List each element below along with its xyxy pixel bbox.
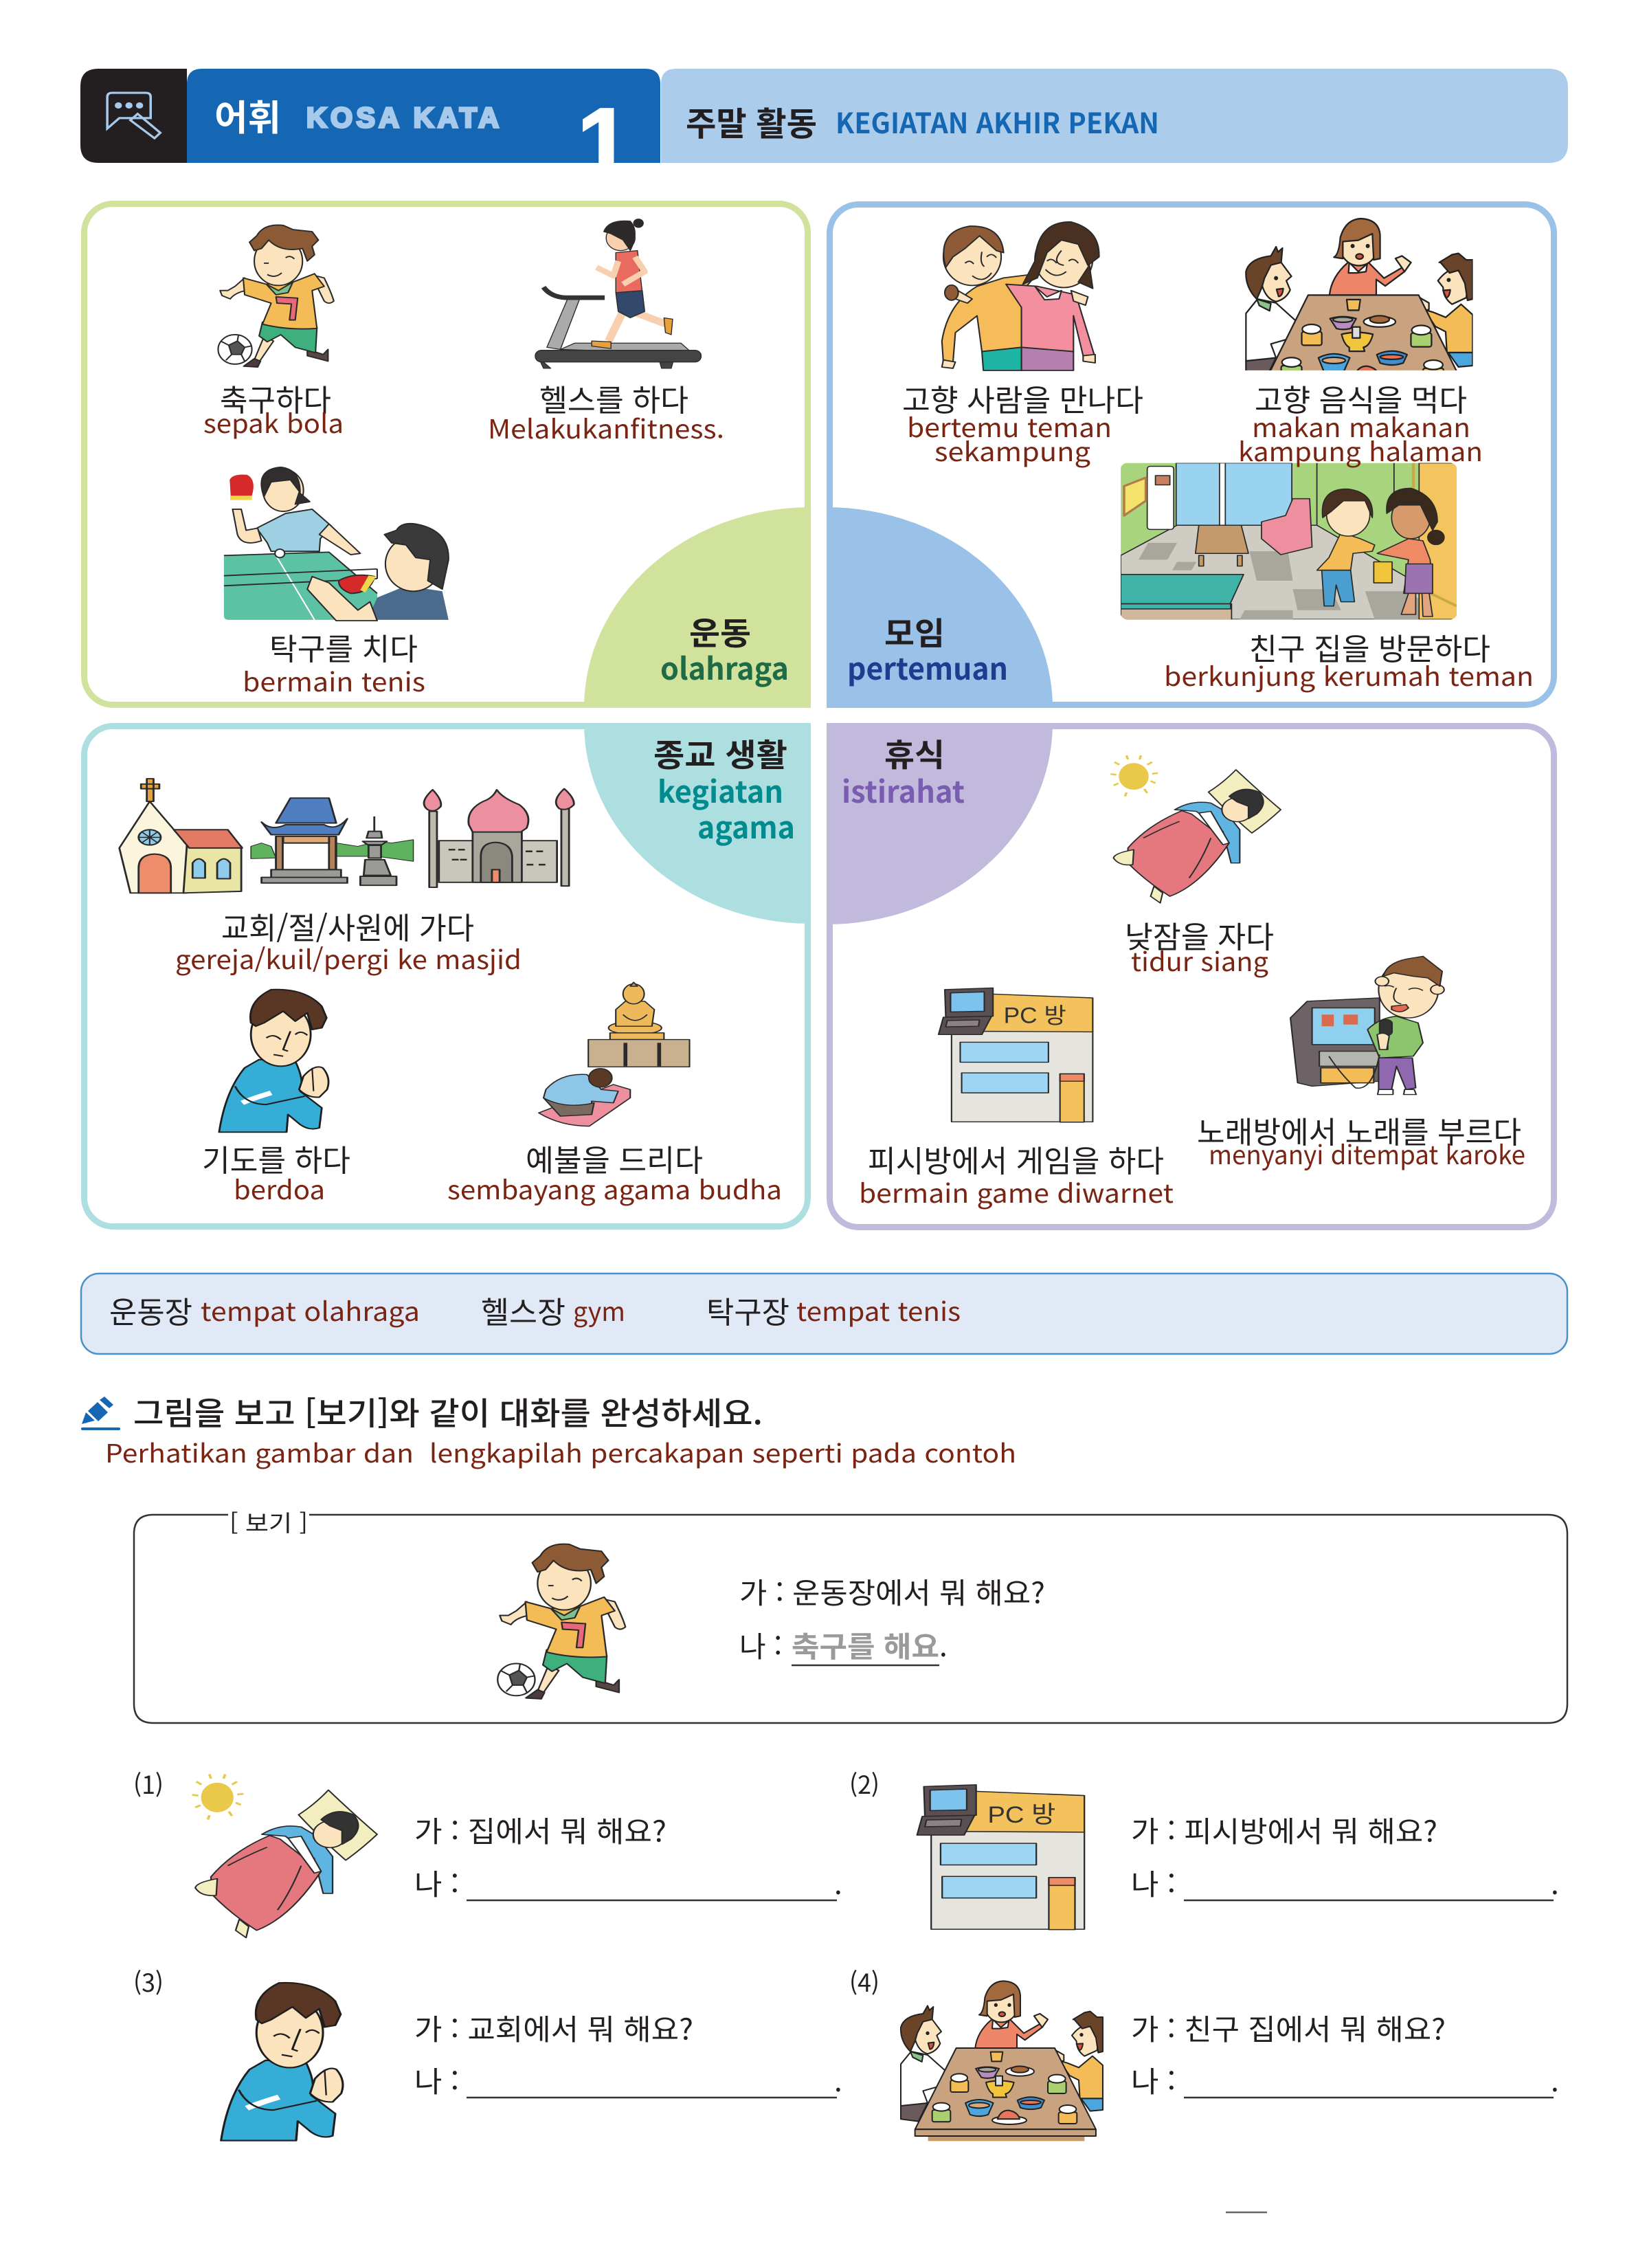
category tab: kegiatan agama: kegiatan xyxy=(658,768,783,812)
dialogue 1: 나 : xyxy=(414,1862,459,1904)
dialogue 4 xyxy=(1131,2007,1559,2101)
panel: gatherings xyxy=(827,205,1554,708)
label: fitness: 헬스를 하다 xyxy=(539,376,688,420)
example dialogue: 축구를 해요 xyxy=(792,1624,939,1666)
illustration: karaoke singer xyxy=(1290,956,1444,1095)
vocabulary note box: 탁구장 xyxy=(706,1288,789,1332)
exercise 1 xyxy=(133,1766,842,1937)
illustration: treadmill runner xyxy=(535,219,701,368)
illustration: boy kicking ball xyxy=(218,225,334,367)
instruction heading: Perhatikan gambar dan lengkapilah percakapan seperti pada contoh xyxy=(105,1433,1016,1470)
header bar xyxy=(80,69,1568,163)
label: table tennis: 탁구를 치다 xyxy=(269,625,418,669)
illustration: two friends xyxy=(942,222,1099,370)
label: visiting a friend: 친구 집을 방문하다 xyxy=(1249,625,1490,669)
illustration: people sharing food xyxy=(1245,217,1473,370)
label: visiting a friend: berkunjung kerumah teman xyxy=(1164,656,1534,693)
category tab: kegiatan agama: agama xyxy=(697,803,795,847)
dialogue 1 xyxy=(414,1809,842,1904)
vocabulary note box: tempat tenis xyxy=(796,1291,961,1328)
label: playing games at PC room: bermain game diwarnet xyxy=(859,1172,1174,1210)
example dialogue: . xyxy=(939,1624,948,1666)
label: table tennis xyxy=(243,625,425,699)
exercise 1: (1) xyxy=(133,1766,164,1801)
exercise 4 xyxy=(849,1964,1559,2141)
vocabulary note box: gym xyxy=(573,1291,625,1328)
label: going to church, temple, mosque xyxy=(175,904,522,977)
illustration: visiting a friend's home xyxy=(1121,463,1457,621)
label: singing at karaoke xyxy=(1197,1108,1525,1172)
label: meeting hometown friends xyxy=(902,376,1143,469)
illustration: church xyxy=(120,779,243,893)
panel: rest xyxy=(827,723,1554,1227)
illustration: mosque xyxy=(424,789,574,887)
dialogue 2: . xyxy=(1551,1862,1559,1904)
exercise 3: (3) xyxy=(133,1964,164,1999)
label: praying: berdoa xyxy=(234,1169,325,1207)
label: soccer: sepak bola xyxy=(203,403,344,441)
label: eating hometown food: 고향 음식을 먹다 xyxy=(1255,376,1467,420)
label: taking a nap xyxy=(1125,913,1274,979)
illustration: table tennis xyxy=(224,467,449,621)
vocabulary note box: 운동장 xyxy=(109,1288,192,1332)
vocabulary note box: tempat olahraga xyxy=(201,1291,420,1328)
label: meeting hometown friends: bertemu teman xyxy=(907,407,1112,445)
dialogue 2: 가 : 피시방에서 뭐 해요? xyxy=(1131,1809,1437,1851)
dialogue 1: 가 : 집에서 뭐 해요? xyxy=(414,1809,666,1851)
label: playing games at PC room xyxy=(859,1137,1174,1210)
header title: weekend activities: KEGIATAN AKHIR PEKAN xyxy=(836,100,1159,142)
illustration: temple xyxy=(251,798,414,885)
icon: pencil xyxy=(81,1397,120,1430)
dialogue 2: 나 : xyxy=(1131,1862,1176,1904)
dialogue 4: . xyxy=(1551,2059,1559,2101)
category tab: pertemuan: 모임 xyxy=(884,609,945,654)
category tab: pertemuan: pertemuan xyxy=(847,645,1008,689)
label: eating hometown food xyxy=(1238,376,1483,469)
category tab: kegiatan agama: 종교 생활 xyxy=(653,731,787,776)
label: going to church, temple, mosque: gereja/kuil/pergi ke masjid xyxy=(175,939,522,977)
label: playing games at PC room: 피시방에서 게임을 하다 xyxy=(868,1137,1164,1181)
category tab: olahraga: 운동 xyxy=(689,609,751,654)
example dialogue: 가 : 운동장에서 뭐 해요? xyxy=(739,1570,1045,1612)
label: taking a nap: tidur siang xyxy=(1131,941,1268,979)
dialogue 4: 가 : 친구 집에서 뭐 해요? xyxy=(1131,2007,1446,2049)
label: Buddhist worship: sembayang agama budha xyxy=(447,1169,782,1207)
category tab: kegiatan agama xyxy=(584,723,811,924)
label: table tennis: bermain tenis xyxy=(243,661,425,699)
illustration: boy praying xyxy=(219,990,328,1132)
label: praying: 기도를 하다 xyxy=(202,1136,350,1180)
header tab: vocabulary: 1 xyxy=(577,88,631,196)
label: going to church, temple, mosque: 교회/절/사원에 가다 xyxy=(221,904,474,948)
instruction heading xyxy=(105,1389,1016,1470)
illustration: boy kicking ball xyxy=(497,1544,625,1699)
vocabulary note box: 헬스장 xyxy=(481,1288,565,1332)
example dialogue xyxy=(739,1570,1045,1666)
exercise 3 xyxy=(133,1964,842,2141)
label: Buddhist worship: 예불을 드리다 xyxy=(526,1136,703,1180)
label: soccer: 축구하다 xyxy=(220,376,331,420)
panel: sports xyxy=(84,203,811,708)
illustration: napping xyxy=(192,1775,377,1937)
label: visiting a friend xyxy=(1164,625,1534,693)
dialogue 3: 나 : xyxy=(414,2059,459,2101)
example dialogue: 나 : xyxy=(739,1624,782,1666)
exercise 4: (4) xyxy=(849,1964,879,1999)
dialogue 4: 나 : xyxy=(1131,2059,1176,2101)
header title: weekend activities xyxy=(661,69,1568,163)
category tab: olahraga xyxy=(584,507,811,708)
dialogue 1: . xyxy=(834,1862,842,1904)
panel: religious life xyxy=(84,723,811,1226)
instruction heading: 그림을 보고 [보기]와 같이 대화를 완성하세요. xyxy=(133,1389,763,1434)
category tab: istirahat xyxy=(827,723,1053,924)
dialogue 3: 가 : 교회에서 뭐 해요? xyxy=(414,2007,693,2049)
dialogue 2 xyxy=(1131,1809,1559,1904)
label: meeting hometown friends: 고향 사람을 만나다 xyxy=(902,376,1143,420)
illustration: napping xyxy=(1110,755,1281,903)
vocabulary note box xyxy=(81,1274,1567,1354)
illustration: bowing before Buddha statue xyxy=(539,982,690,1126)
exercise 2: (2) xyxy=(849,1766,879,1801)
header tab: vocabulary: KOSA KATA xyxy=(306,102,499,133)
example box xyxy=(134,1505,1567,1723)
label: praying xyxy=(202,1136,350,1207)
category tab: istirahat: istirahat xyxy=(842,768,965,812)
example tag: [ 보기 ] xyxy=(229,1505,308,1538)
illustration: boy praying xyxy=(221,1983,343,2141)
exercise 2 xyxy=(849,1766,1559,1930)
label: fitness xyxy=(488,376,724,446)
header tab: vocabulary xyxy=(187,69,660,163)
label: meeting hometown friends: sekampung xyxy=(934,431,1090,469)
header title: weekend activities: 주말 활동 xyxy=(686,97,817,145)
illustration: PC room xyxy=(917,1785,1084,1930)
label: fitness: Melakukanfitness. xyxy=(488,408,724,446)
illustration: people sharing food xyxy=(901,1981,1103,2141)
illustration: PC room xyxy=(939,988,1093,1122)
dialogue 3 xyxy=(414,2007,842,2101)
label: Buddhist worship xyxy=(447,1136,782,1207)
label: eating hometown food: makan makanan xyxy=(1252,407,1470,445)
label: eating hometown food: kampung halaman xyxy=(1238,431,1483,469)
dialogue 3: . xyxy=(834,2059,842,2101)
header tab: vocabulary: 어휘 xyxy=(214,89,281,141)
category tab: olahraga: olahraga xyxy=(660,645,789,689)
label: soccer xyxy=(203,376,344,441)
label: taking a nap: 낮잠을 자다 xyxy=(1125,913,1274,957)
label: singing at karaoke: menyanyi ditempat karoke xyxy=(1209,1134,1525,1172)
label: singing at karaoke: 노래방에서 노래를 부르다 xyxy=(1197,1108,1521,1152)
category tab: istirahat: 휴식 xyxy=(884,731,945,776)
icon: speech bubble with pencil xyxy=(80,69,187,163)
category tab: pertemuan xyxy=(827,507,1053,708)
